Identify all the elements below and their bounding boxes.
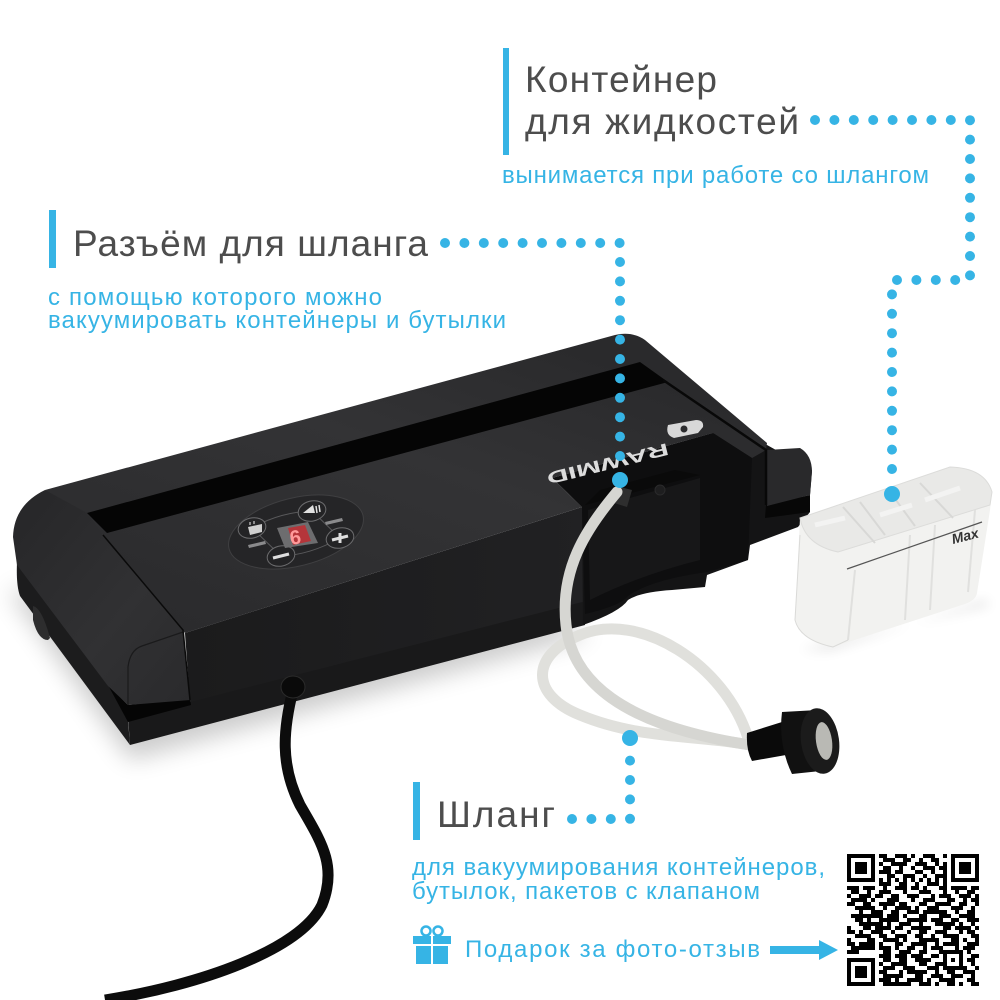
- container lid: [800, 467, 992, 552]
- heading: Разъём для шланга: [73, 223, 428, 264]
- icon: gift: [413, 926, 451, 964]
- device top face: [45, 334, 767, 633]
- accent bar: [503, 48, 509, 155]
- arrow: [770, 940, 838, 960]
- cord strain relief: [281, 676, 305, 698]
- button: plug: [236, 515, 268, 541]
- callout: container: [502, 48, 929, 189]
- callout: hose: [412, 782, 825, 905]
- description: вынимается при работе со шлангом: [502, 162, 929, 189]
- device front face: [185, 507, 590, 702]
- dotted leader: connector: [445, 243, 628, 488]
- liquid container: [795, 467, 992, 650]
- accent bar: [49, 210, 56, 268]
- QR code: [847, 856, 979, 984]
- button: plus: [324, 525, 356, 551]
- power cord: [105, 690, 328, 1000]
- button: minus: [265, 543, 297, 569]
- power switch: [33, 606, 50, 640]
- max line: [847, 522, 982, 569]
- heading: Контейнер: [525, 59, 717, 100]
- dotted leader: container: [815, 120, 970, 502]
- brand logo: [545, 420, 703, 488]
- brand logo: RAWMID: [545, 439, 671, 488]
- description: вакуумировать контейнеры и бутылки: [48, 307, 506, 334]
- film slot: [87, 362, 668, 533]
- device lower base: [17, 562, 130, 745]
- dotted leader: hose: [572, 730, 638, 819]
- accent bar: [413, 782, 420, 840]
- white hose: [542, 492, 750, 745]
- control panel: [221, 482, 371, 582]
- description: для вакуумирования контейнеров,: [412, 854, 825, 881]
- heading: для жидкостей: [525, 101, 799, 142]
- hose connector: [747, 706, 843, 776]
- gift text: Подарок за фото-отзыв: [465, 936, 760, 963]
- button: play pause: [296, 498, 328, 524]
- hose recess: [553, 433, 752, 614]
- description: с помощью которого можно: [48, 284, 382, 311]
- display: 6: [288, 526, 303, 550]
- device left cap: [13, 490, 190, 705]
- callout: connector: [48, 210, 506, 334]
- max label: Max: [950, 525, 981, 547]
- display: [277, 522, 318, 550]
- panel labels: [248, 518, 343, 548]
- heading: Шланг: [437, 794, 555, 835]
- hose fitting: [614, 487, 632, 507]
- device right end: [552, 433, 812, 625]
- description: бутылок, пакетов с клапаном: [412, 878, 760, 905]
